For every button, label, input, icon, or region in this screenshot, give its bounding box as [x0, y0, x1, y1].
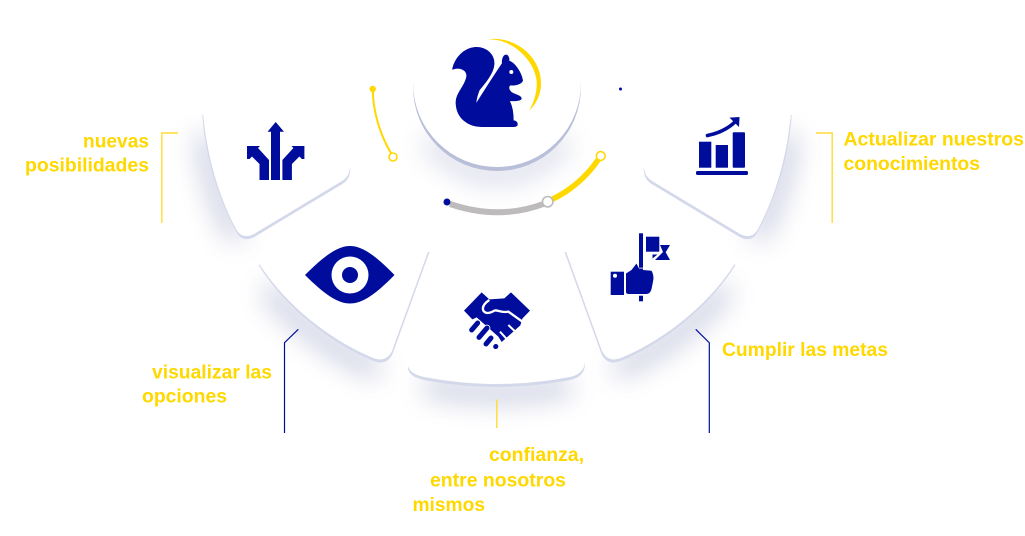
panel: confianza: [408, 340, 585, 393]
icon: three arrows: [247, 122, 304, 180]
panel: actualizar conocimientos: [644, 100, 792, 239]
connector: nuevas posibilidades: [162, 133, 178, 223]
icon: growth chart: [696, 117, 748, 175]
panel: cumplir metas: [564, 230, 736, 370]
connector: cumplir: [696, 329, 709, 433]
text: confianza entre nosotros mismos: entre nosotros: [430, 470, 566, 492]
text: actualizar conocimientos: conocimientos: [844, 153, 980, 175]
connector: confianza: [496, 400, 498, 428]
panel: nuevas posibilidades: [202, 100, 350, 239]
text: visualizar las opciones: opciones: [142, 386, 227, 408]
small dot: [619, 88, 622, 90]
text: actualizar conocimientos: [844, 128, 1024, 175]
text: confianza entre nosotros mismos: [412, 444, 584, 516]
timeline: progress arc: [444, 152, 605, 212]
panel: central circle: [413, 0, 581, 175]
connector: visualizar: [284, 329, 298, 433]
text: nuevas posibilidades: nuevas: [83, 130, 149, 152]
text: visualizar las opciones: [142, 362, 272, 408]
connector: actualizar: [816, 133, 832, 223]
icon: eye: [305, 246, 394, 304]
timeline: yellow thin arc: [370, 86, 397, 161]
icon: squirrel logo: [453, 39, 541, 127]
yellow crescent: [487, 39, 541, 111]
icon: thumb up with flags: [611, 233, 670, 301]
text: confianza entre nosotros mismos: mismos: [412, 494, 485, 516]
text: nuevas posibilidades: [25, 130, 149, 176]
panel: visualizar opciones: [258, 230, 430, 370]
squirrel: [453, 47, 523, 127]
text: cumplir las metas: Cumplir las metas: [722, 339, 888, 361]
text: confianza entre nosotros mismos: confianza,: [489, 444, 584, 466]
icon: handshake: [464, 292, 530, 347]
text: actualizar conocimientos: Actualizar nuestros: [844, 128, 1024, 150]
text: nuevas posibilidades: posibilidades: [25, 154, 149, 176]
text: visualizar las opciones: visualizar las: [152, 362, 272, 384]
